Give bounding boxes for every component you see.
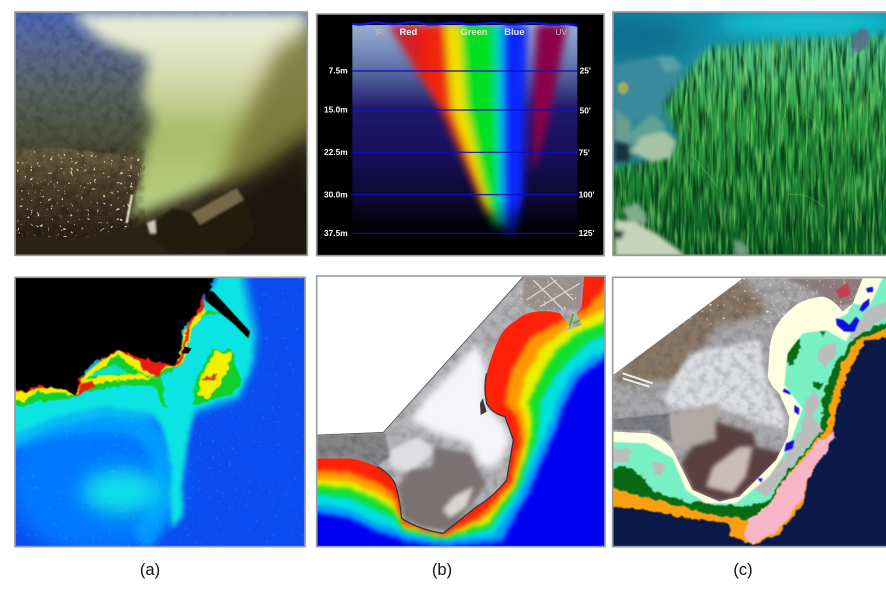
smoke plume [70,13,307,215]
spectrum labels: Blue [504,27,524,37]
metre labels: 30.0m [324,189,348,199]
inner cyan lagoon [85,364,128,377]
metre labels: 7.5m [329,66,348,76]
orange class [614,327,886,546]
vent jet [125,195,133,223]
spectrum labels: Green [461,27,488,37]
light spectrum wedge [352,25,577,247]
surface wave [352,22,577,26]
water column gradient [352,25,577,245]
soft edge of turbid water [5,270,258,450]
caption (a): (a) [140,561,160,579]
lower rocks [615,131,748,256]
volcano crater [681,422,783,502]
land image [606,277,886,504]
rocky slope [15,148,143,238]
volcano crater [397,447,487,532]
caption (b): (b) [432,561,452,579]
slope around crater [669,403,716,450]
feet labels: 125' [579,228,595,238]
seabed stones [615,56,683,148]
white no-data area [315,275,525,435]
right dark boulder [223,191,307,256]
spectrum labels: UV [556,27,568,37]
white no-data area [611,276,743,377]
spectrum labels: IR [375,27,384,37]
seagrass [608,28,886,258]
bright slopes [410,343,510,467]
metre labels: 37.5m [324,228,348,238]
dark green patches in bay [786,332,826,390]
light aquamarine class [606,270,886,507]
spectrum labels: Red [400,27,417,37]
land texture [318,277,584,528]
caption (c): (c) [733,561,753,579]
lighter water [16,418,190,546]
panel: (a) thematic map with plume [5,270,305,557]
panel: seagrass meadow photograph [612,11,886,256]
black land [16,278,214,396]
coast shadow [377,373,513,533]
fish [848,28,870,58]
depth lines [352,71,577,233]
city blocks [523,277,584,312]
panel: (b) bathymetry map [310,270,610,547]
coastal green band [5,310,250,410]
feet labels: 50' [580,105,591,115]
depth colour bands [310,270,610,547]
land image [318,276,584,532]
feet labels [579,66,595,238]
panel: (c) seabed classification map [606,270,886,547]
metre labels: 22.5m [324,147,348,157]
grey class [606,297,886,498]
image boundary line [317,277,523,435]
feet labels: 100' [579,189,595,199]
blue class patches [758,287,873,483]
panel: underwater vent photograph [15,12,317,256]
cyan turbid water and plume [5,270,252,528]
island in the plume [192,350,242,407]
cream class [606,270,883,503]
coastal yellow band [5,307,207,401]
left grey strip [317,432,390,467]
olive tint to the right [217,21,317,188]
seabed [16,225,147,254]
dark water at right [198,122,306,222]
spectrum labels [375,27,568,37]
coastal red band [5,297,205,396]
town [786,278,863,307]
grass blades [691,41,878,221]
image boundary line [613,278,743,375]
metre labels [324,66,348,238]
metre labels: 15.0m [324,105,348,115]
panel: light attenuation by depth diagram [317,14,604,256]
dark green class [606,270,886,520]
feet labels: 75' [579,148,590,158]
pink class [743,432,837,545]
boulder [147,188,255,255]
feet labels: 25' [580,66,591,76]
